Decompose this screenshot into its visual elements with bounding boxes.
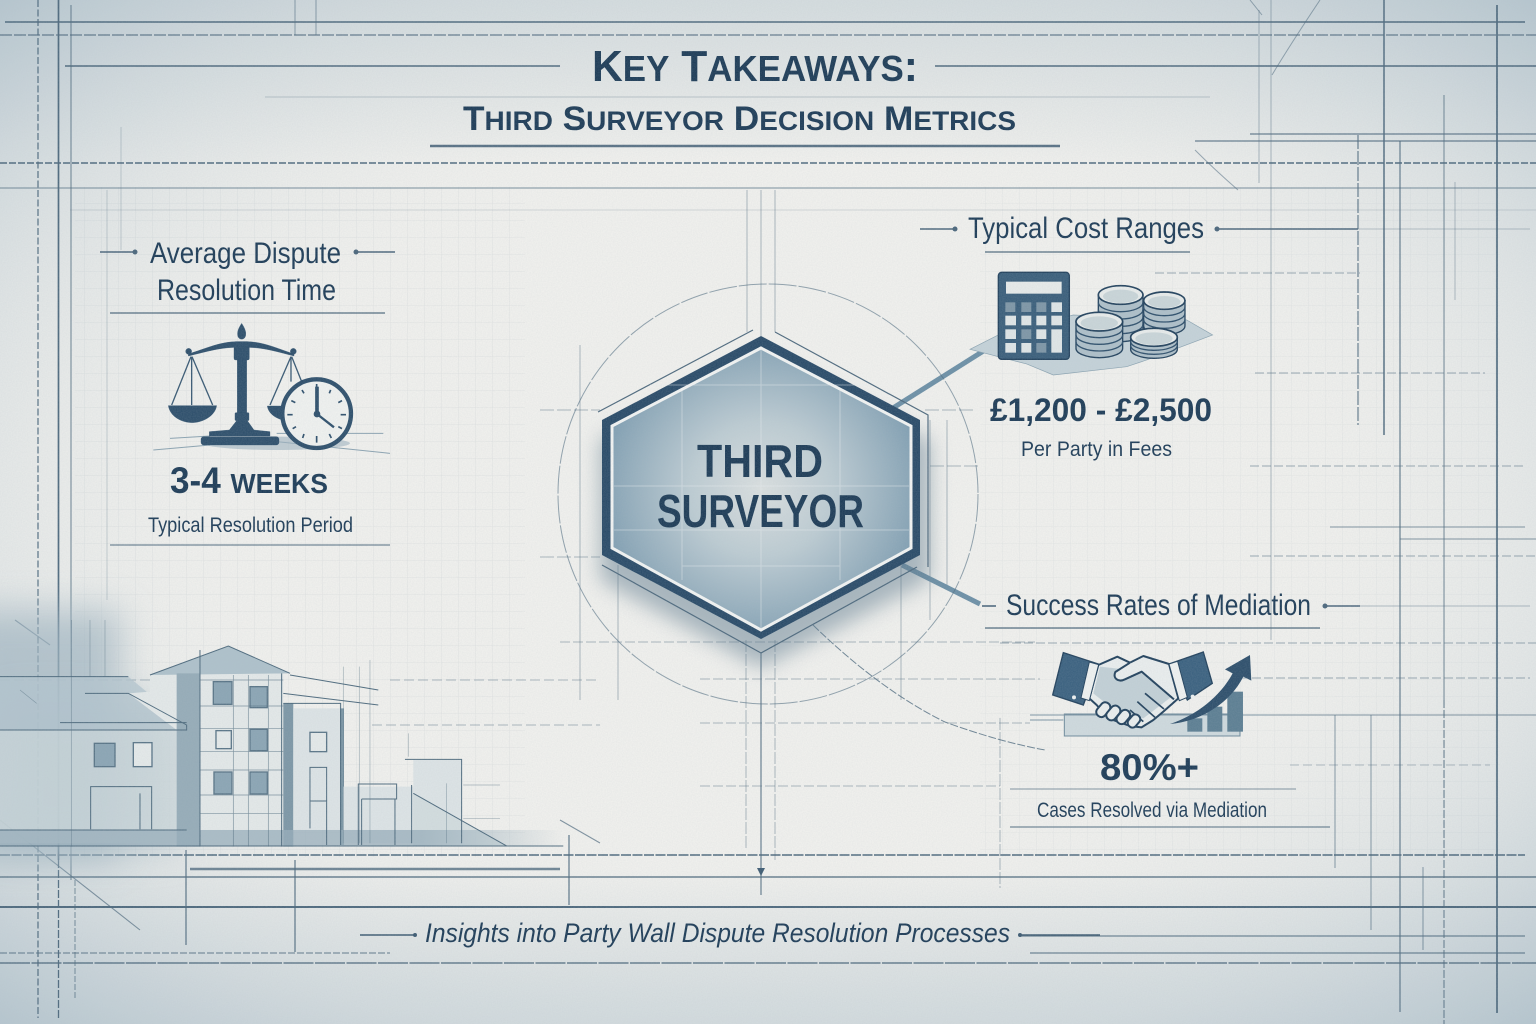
heading: Resolution Time (157, 274, 336, 307)
panel: typical cost ranges (920, 212, 1530, 461)
hexagon label: SURVEYOR (657, 485, 864, 537)
footer tagline: Insights into Party Wall Dispute Resolution Processes (425, 918, 1010, 948)
hexagon label: THIRD (697, 435, 823, 487)
connector: lower right (902, 565, 980, 604)
icon: calculator and coins (970, 272, 1213, 375)
icon: handshake and growth arrow (1030, 652, 1270, 736)
metric: 80%+: 80%+ (1100, 747, 1199, 788)
heading (100, 237, 395, 313)
heading: Typical Cost Ranges (968, 212, 1204, 245)
panel: average dispute resolution time (100, 237, 395, 545)
building sketch (0, 610, 563, 860)
caption: Typical Resolution Period (148, 514, 353, 537)
heading: Average Dispute (150, 237, 341, 270)
panel: success rates of mediation (982, 589, 1530, 827)
central hexagon (598, 330, 930, 668)
subtitle: THIRD SURVEYOR DECISION METRICS (463, 100, 1016, 138)
heading (920, 212, 1530, 252)
connector: left (350, 426, 602, 430)
title: KEY TAKEAWAYS: (592, 42, 918, 91)
metric: fee range: £1,200 - £2,500 (990, 392, 1212, 428)
heading (982, 589, 1530, 628)
construction circle (558, 284, 978, 704)
heading: Success Rates of Mediation (1006, 589, 1311, 622)
hexagon label (657, 435, 864, 537)
caption: Per Party in Fees (1021, 438, 1172, 461)
connector: upper right (893, 350, 985, 408)
arrow: down marker (757, 868, 765, 876)
icon: scales and clock (153, 323, 390, 453)
metric: 3-4 weeks: 3-4 WEEKS (170, 460, 328, 501)
caption: Cases Resolved via Mediation (1037, 799, 1267, 822)
